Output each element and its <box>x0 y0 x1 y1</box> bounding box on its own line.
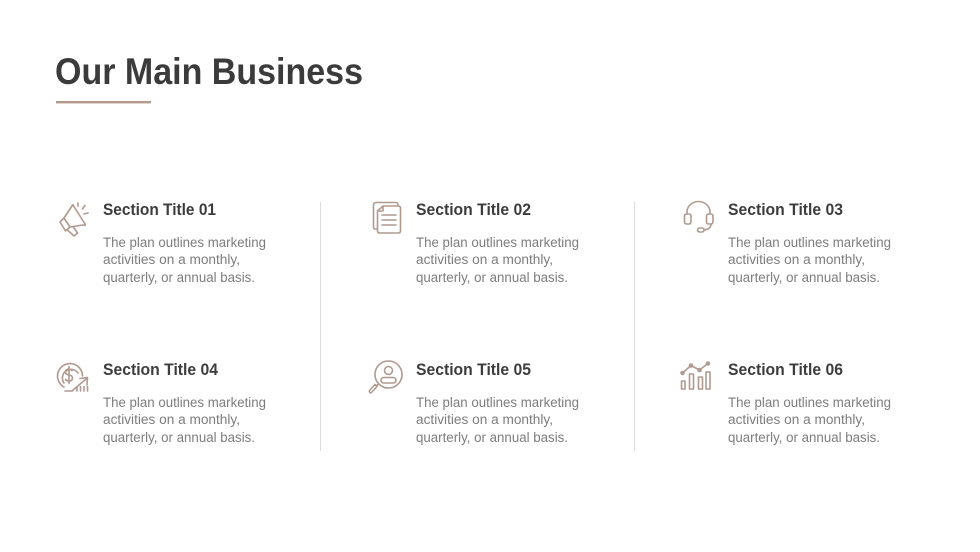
text block 04 <box>103 395 266 445</box>
icon: megaphone <box>60 203 88 236</box>
text block 06: activities on a monthly, <box>728 412 865 427</box>
text block 05: quarterly, or annual basis. <box>416 430 568 445</box>
text block 03: The plan outlines marketing <box>728 235 891 250</box>
text block 05: The plan outlines marketing <box>416 395 579 410</box>
text block 02: activities on a monthly, <box>416 252 553 267</box>
icon: magnifier with person <box>369 361 402 393</box>
heading 05: Section Title 05 <box>416 360 531 379</box>
text block 01 <box>103 235 266 285</box>
text block 02: quarterly, or annual basis. <box>416 270 568 285</box>
text block 06: The plan outlines marketing <box>728 395 891 410</box>
text block 05 <box>416 395 579 445</box>
icon: dollar growth <box>58 364 88 391</box>
text block 05: activities on a monthly, <box>416 412 553 427</box>
text block 04: quarterly, or annual basis. <box>103 430 255 445</box>
section 06 <box>681 360 891 445</box>
section 05 <box>369 360 579 445</box>
text block 04: activities on a monthly, <box>103 412 240 427</box>
section 02 <box>374 200 579 285</box>
icon: headset <box>684 202 713 232</box>
title: Our Main Business <box>55 51 363 92</box>
section 03 <box>684 200 891 285</box>
text block 03: activities on a monthly, <box>728 252 865 267</box>
heading 02: Section Title 02 <box>416 200 531 219</box>
text block 02: The plan outlines marketing <box>416 235 579 250</box>
heading 03: Section Title 03 <box>728 200 843 219</box>
heading 06: Section Title 06 <box>728 360 843 379</box>
heading 01: Section Title 01 <box>103 200 216 219</box>
text block 03: quarterly, or annual basis. <box>728 270 880 285</box>
text block 01: The plan outlines marketing <box>103 235 266 250</box>
text block 01: activities on a monthly, <box>103 252 240 267</box>
text block 02 <box>416 235 579 285</box>
icon: bar and line chart <box>681 362 710 389</box>
icon: documents <box>374 202 400 233</box>
text block 03 <box>728 235 891 285</box>
text block 04: The plan outlines marketing <box>103 395 266 410</box>
title underline <box>56 101 151 103</box>
section 01 <box>60 200 266 285</box>
text block 01: quarterly, or annual basis. <box>103 270 255 285</box>
heading 04: Section Title 04 <box>103 360 218 379</box>
text block 06: quarterly, or annual basis. <box>728 430 880 445</box>
text block 06 <box>728 395 891 445</box>
section 04 <box>58 360 266 445</box>
